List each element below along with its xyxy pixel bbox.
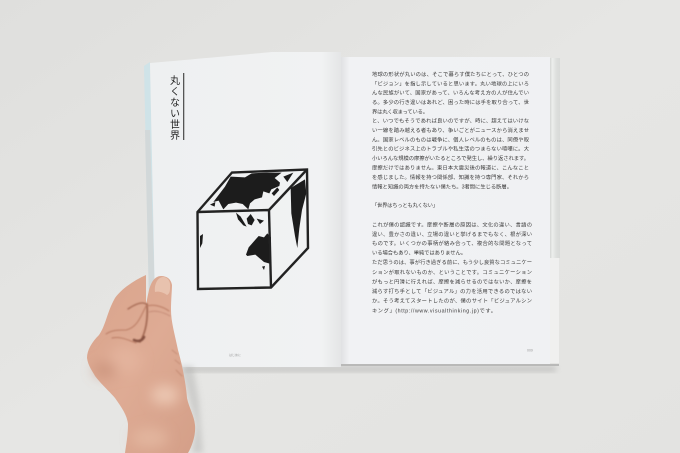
cube outline bbox=[198, 170, 308, 289]
subheading quote: 「世界はちっとも丸くない」 bbox=[372, 201, 438, 209]
right page body text bbox=[372, 70, 532, 314]
paragraph 1: 地球の形状が丸いのは、そこで暮らす僕たちにとって、ひとつの bbox=[372, 70, 529, 78]
paragraph 2: これが僕の認識です。摩擦や断層の原因は、文化の違い、言語の bbox=[372, 220, 532, 228]
hand shadow bbox=[180, 366, 203, 453]
paragraph 1: 引先とのビジネス上のトラブルや私生活のつまらない喧嘩に。大 bbox=[372, 145, 530, 153]
paragraph 1: ん。国家レベルのものは戦争に、個人レベルのものは、同僚や取 bbox=[372, 135, 530, 143]
paragraph 2: キング」(http://www.visualthinking.jp)です。 bbox=[372, 306, 496, 314]
paragraph 1: い一線を踏み越える者もあり、争いごとがニュースから消えませ bbox=[372, 126, 529, 134]
paragraph 2: ただ思うのは、事が行き過ぎる前に、もう少し良質なコミュニケー bbox=[372, 258, 532, 266]
paragraph 1 bbox=[372, 70, 530, 190]
paragraph 1: 情報と知識の両方を持たない僕たち。3者間に生じる断層。 bbox=[372, 182, 512, 190]
hand shape bbox=[87, 275, 195, 453]
left page bbox=[150, 52, 341, 367]
book shadow bbox=[185, 366, 556, 372]
right page bbox=[341, 57, 550, 364]
paragraph 2: 違い、豊かさの違い、立場の違いと挙げるまでもなく、根が深い bbox=[372, 230, 532, 238]
book bbox=[144, 52, 560, 367]
book page edges bbox=[183, 58, 560, 366]
hand highlights and shading bbox=[93, 346, 179, 448]
paragraph 2: ものです。いくつかの事柄が絡み合って、複合的な問題となって bbox=[372, 239, 532, 247]
paragraph 2 bbox=[372, 220, 532, 314]
heading: vertical title: 丸くない世界 bbox=[168, 74, 180, 141]
icon: cube with world map bbox=[198, 170, 308, 289]
paragraph 1: 小いろんな規模の摩擦がいたるところで発生し、繰り返されます。 bbox=[372, 154, 529, 162]
jacket strip, lower silver part bbox=[145, 130, 155, 300]
paragraph 1: 摩擦だけではありません。東日本大震災後の報道に、こんなこと bbox=[372, 164, 529, 172]
paragraph 2: いる場合もあり、単純ではありません。 bbox=[372, 249, 466, 257]
paragraph 1: る。多少の行き違いはあれど、困った時には手を取り合って、世 bbox=[372, 98, 530, 106]
paragraph 2: か。そう考えてスタートしたのが、僕のサイト「ビジュアルシン bbox=[372, 297, 532, 305]
paragraph 1: 「ビジョン」を指し示していると思います。丸い地球の上にいろ bbox=[372, 79, 529, 87]
paragraph 1: と、いつでもそうであれば良いのですが、時に、超えてはいけな bbox=[372, 117, 529, 125]
page number right: 009 bbox=[527, 348, 533, 352]
hand fingers and creases bbox=[106, 303, 182, 376]
thumbnail bbox=[155, 277, 170, 295]
paragraph 1: んな民族がいて、国家があって、いろんな考え方の人が住んでい bbox=[372, 89, 529, 97]
page number left: はじめに bbox=[229, 352, 241, 357]
paragraph 2: ションが取れないものか、ということです。コミュニケーション bbox=[372, 268, 532, 276]
hand holding book bbox=[87, 275, 195, 453]
paragraph 1: 界は丸く収まっている。 bbox=[372, 107, 428, 115]
paragraph 2: がもっと円滑に行えれば、摩擦を減らせるのではないか、摩擦を bbox=[372, 277, 532, 285]
map continents bbox=[200, 173, 306, 270]
title rule bbox=[183, 73, 184, 140]
book jacket strip, left bbox=[144, 62, 155, 300]
paragraph 2: 減らす打ち手として「ビジュアル」の力を活用できるのではない bbox=[372, 287, 532, 295]
paragraph 1: を感じました。情報を持つ関係部、知識を持つ専門家、それから bbox=[372, 173, 529, 181]
